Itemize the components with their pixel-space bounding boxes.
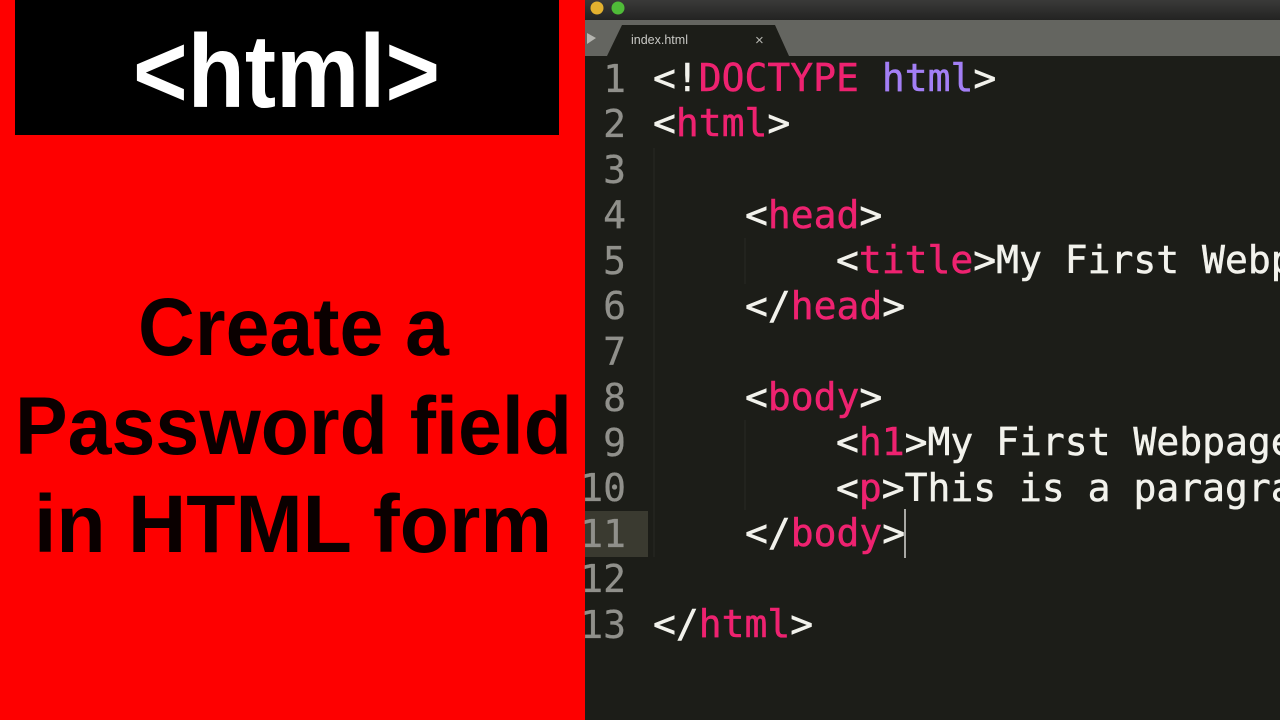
- active tab: index.html: index.html: [631, 33, 688, 47]
- active tab: index.html: [607, 25, 789, 56]
- icon: green window button: [612, 2, 624, 14]
- text cursor: [904, 509, 906, 558]
- title bar: [585, 0, 1280, 20]
- code text: <body>: [745, 375, 882, 419]
- panel: code editor window: [580, 0, 1280, 720]
- tab bar: [585, 20, 1280, 56]
- line numbers: 11: [580, 512, 626, 556]
- line numbers: 4: [603, 193, 626, 237]
- line numbers: 12: [580, 557, 626, 601]
- line numbers: 6: [603, 284, 626, 328]
- heading: Create a Password field in HTML form: Password field: [15, 381, 572, 472]
- heading: Create a Password field in HTML form: Create a: [138, 282, 450, 373]
- code text: </html>: [653, 602, 813, 646]
- line numbers: 2: [603, 102, 626, 146]
- line numbers: 13: [580, 603, 626, 647]
- heading: Create a Password field in HTML form: in HTML form: [34, 479, 552, 570]
- banner: html tag: <html>: [133, 14, 440, 130]
- line numbers: 3: [603, 148, 626, 192]
- icon: yellow window button: [590, 2, 604, 14]
- heading: Create a Password field in HTML form: [15, 282, 572, 570]
- active tab: index.html: ×: [755, 32, 764, 49]
- code text: </head>: [745, 284, 905, 328]
- line numbers: 8: [603, 376, 626, 420]
- code text: <!DOCTYPE html>: [653, 56, 996, 100]
- line numbers: 5: [603, 239, 626, 283]
- line numbers: 7: [603, 330, 626, 374]
- banner: html tag: [15, 0, 559, 135]
- line numbers: 9: [603, 421, 626, 465]
- indent guides: [654, 148, 745, 557]
- panel: red title panel: [0, 0, 585, 720]
- code text: <head>: [745, 193, 882, 237]
- line numbers: [580, 57, 626, 647]
- icon: sidebar arrow: [587, 33, 596, 44]
- current line highlight: [585, 511, 648, 557]
- code text: <html>: [653, 101, 790, 145]
- code text: </body>: [745, 511, 905, 555]
- code text: [653, 56, 1280, 646]
- line numbers: 10: [580, 466, 626, 510]
- line numbers: 1: [603, 57, 626, 101]
